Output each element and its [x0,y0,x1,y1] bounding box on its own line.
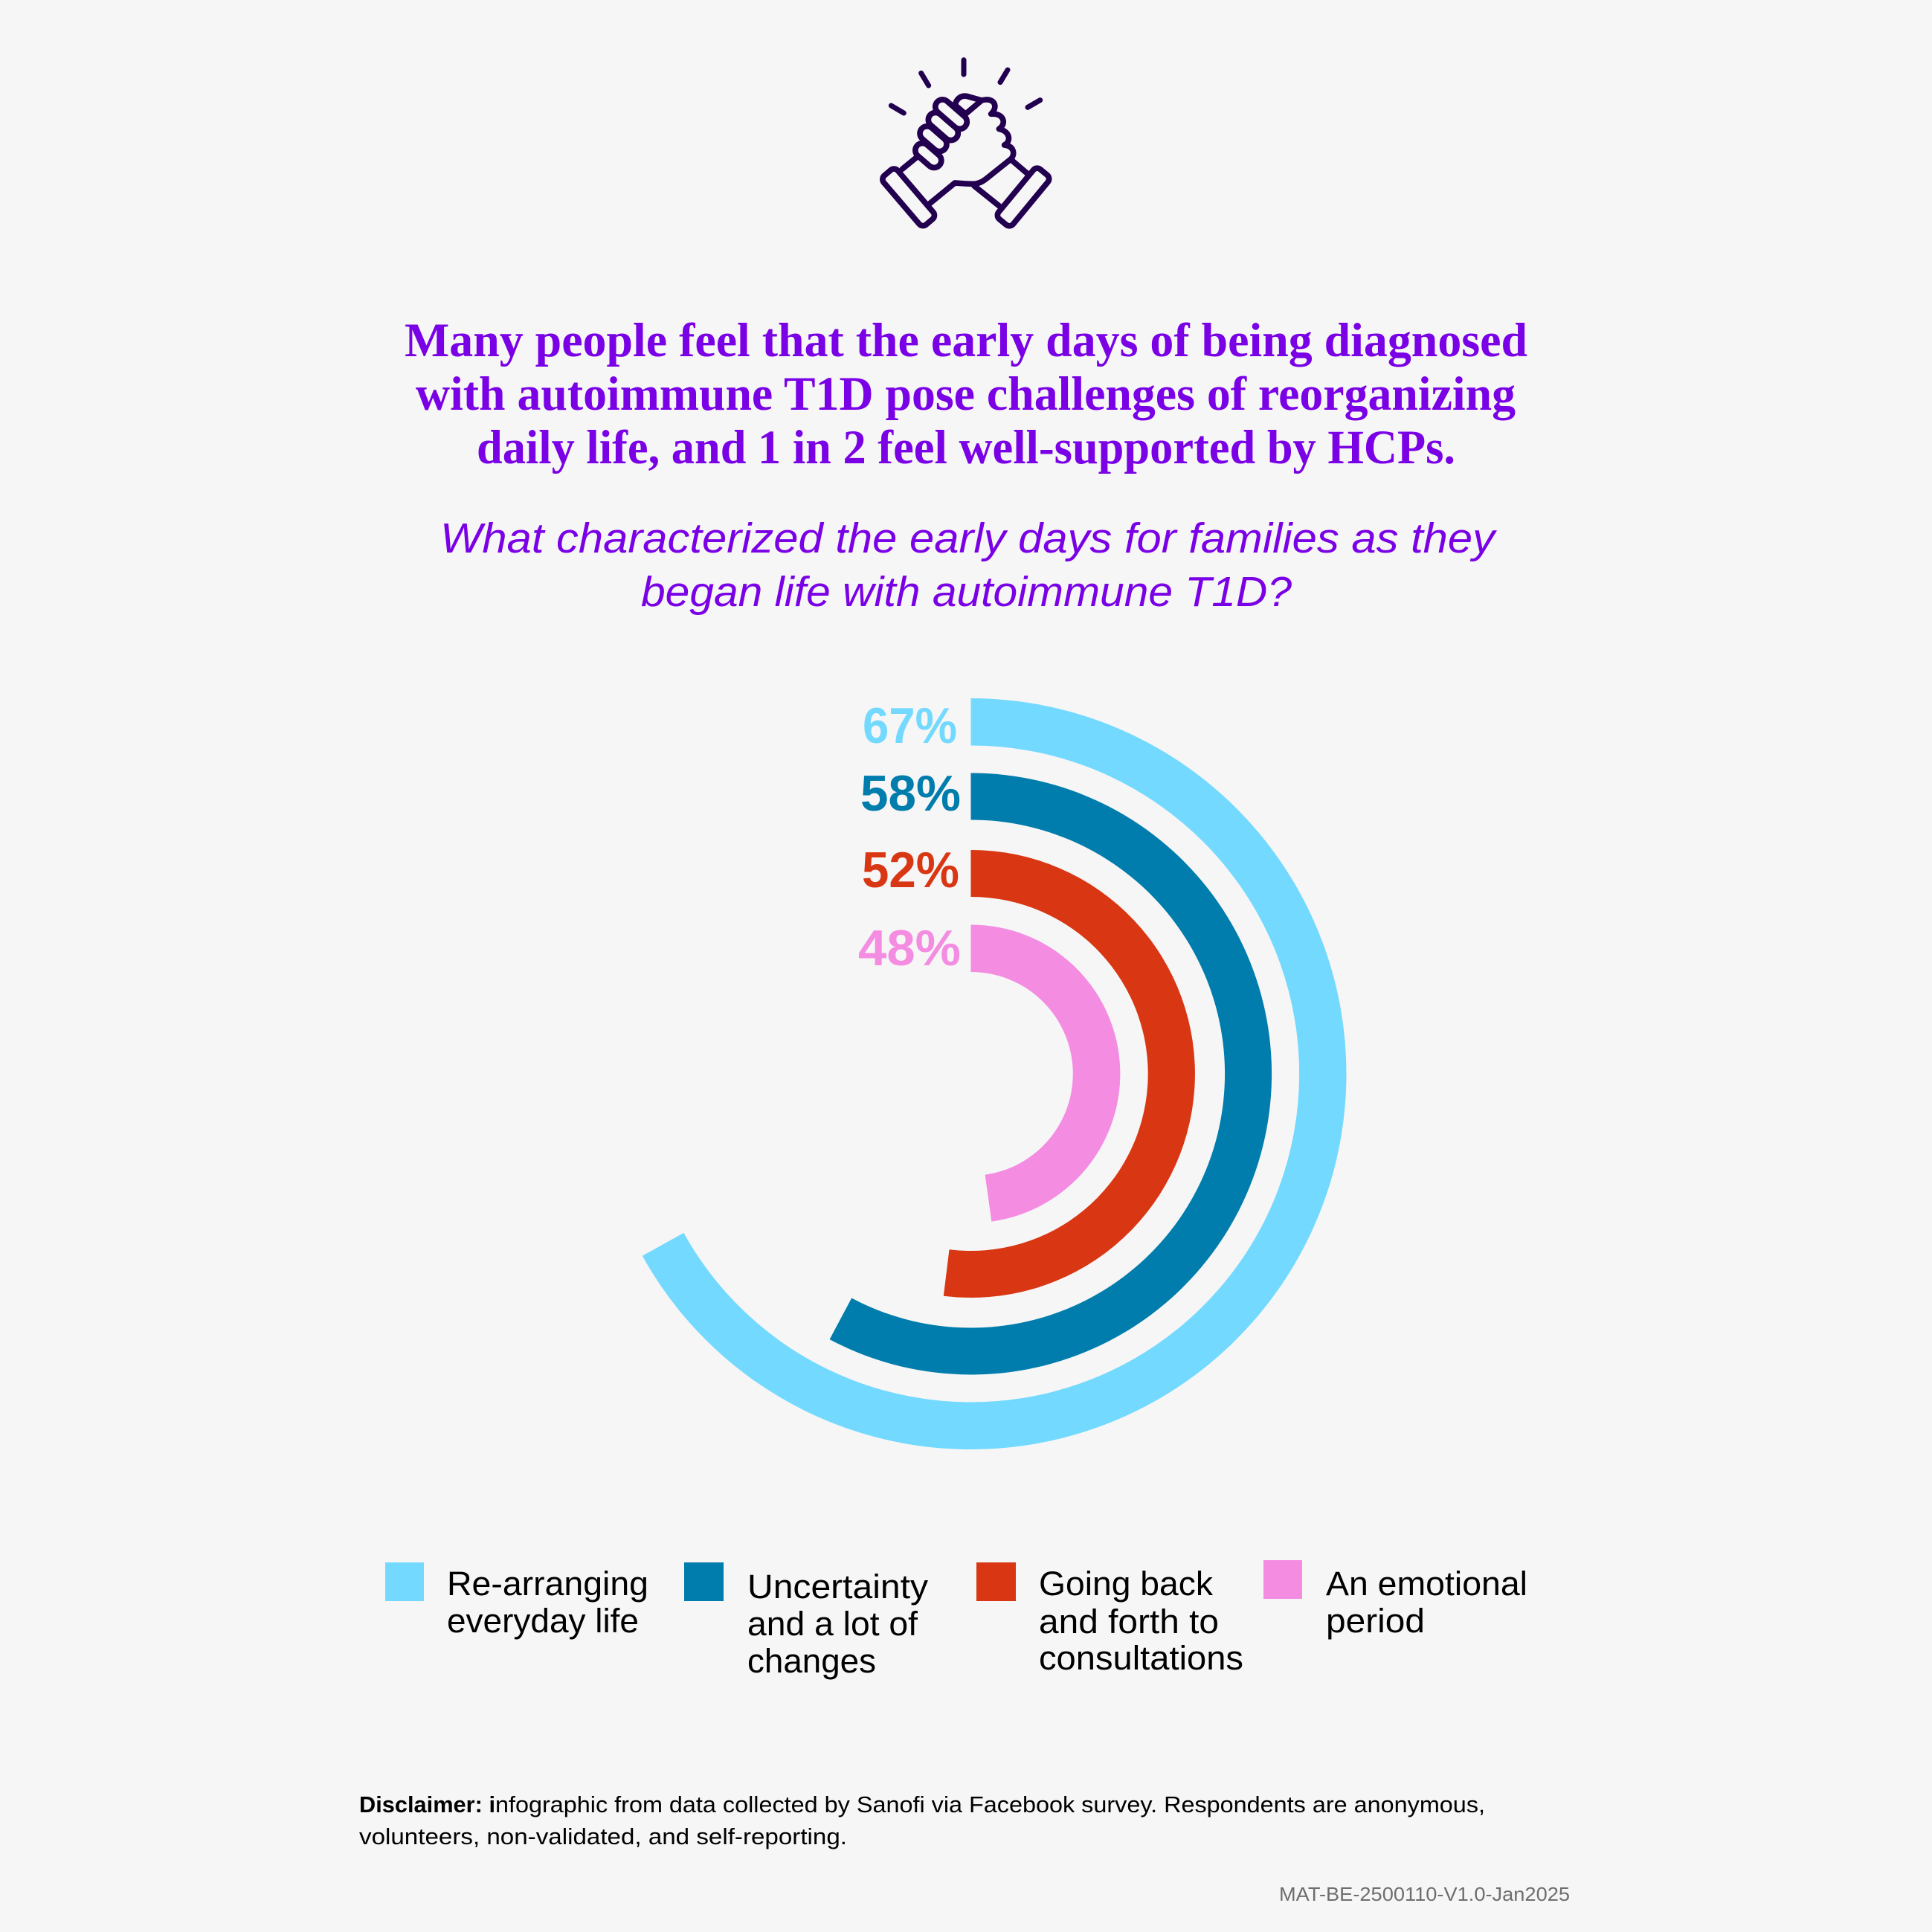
value 67%: 67% [863,698,957,754]
legend item: uncertainty [684,1562,929,1680]
legend item: re-arranging everyday life: Re-arranging [447,1565,648,1603]
radial bar chart [643,698,1346,1449]
legend item: re-arranging everyday life: everyday life [447,1602,639,1640]
legend item: re-arranging everyday life [385,1562,648,1640]
disclaimer: nfographic from data collected by Sanofi via Facebook survey. Respondents are anonymous, [495,1791,1485,1817]
subheading question [440,515,1498,616]
disclaimer: Disclaimer: i [359,1791,495,1817]
bar: uncertainty 58% [830,773,1272,1374]
legend [385,1560,1527,1680]
value 58%: 58% [860,765,961,822]
icon: clasped hands [880,60,1051,228]
legend item: emotional period [1263,1560,1527,1640]
subheading question: began life with autoimmune T1D? [641,568,1292,616]
legend item: uncertainty: Uncertainty [747,1568,929,1606]
legend item: emotional period: An emotional [1326,1565,1527,1603]
bar: emotional period 48% [971,924,1120,1222]
legend item: emotional period: period [1326,1602,1425,1640]
subheading question: What characterized the early days for families as they [440,515,1498,562]
legend item: going back and forth: Going back [1039,1565,1214,1603]
legend item: uncertainty: changes [747,1642,876,1680]
bar: re-arranging everyday life 67% [643,698,1346,1449]
value 52%: 52% [862,842,959,898]
disclaimer: volunteers, non-validated, and self-reporting. [359,1823,847,1849]
legend item: going back and forth [976,1562,1243,1677]
legend item: uncertainty: and a lot of [747,1605,918,1643]
heading: with autoimmune T1D pose challenges of reorganizing [416,367,1516,421]
legend item: going back and forth: and forth to [1039,1603,1219,1640]
heading: daily life, and 1 in 2 feel well-supported by HCPs. [477,421,1455,474]
material code: MAT-BE-2500110-V1.0-Jan2025 [1279,1883,1570,1905]
heading [405,314,1527,474]
disclaimer [359,1791,1485,1849]
value 48%: 48% [858,920,961,976]
bar: consultations 52% [944,850,1195,1298]
heading: Many people feel that the early days of being diagnosed [405,314,1527,367]
legend item: going back and forth: consultations [1039,1639,1243,1677]
